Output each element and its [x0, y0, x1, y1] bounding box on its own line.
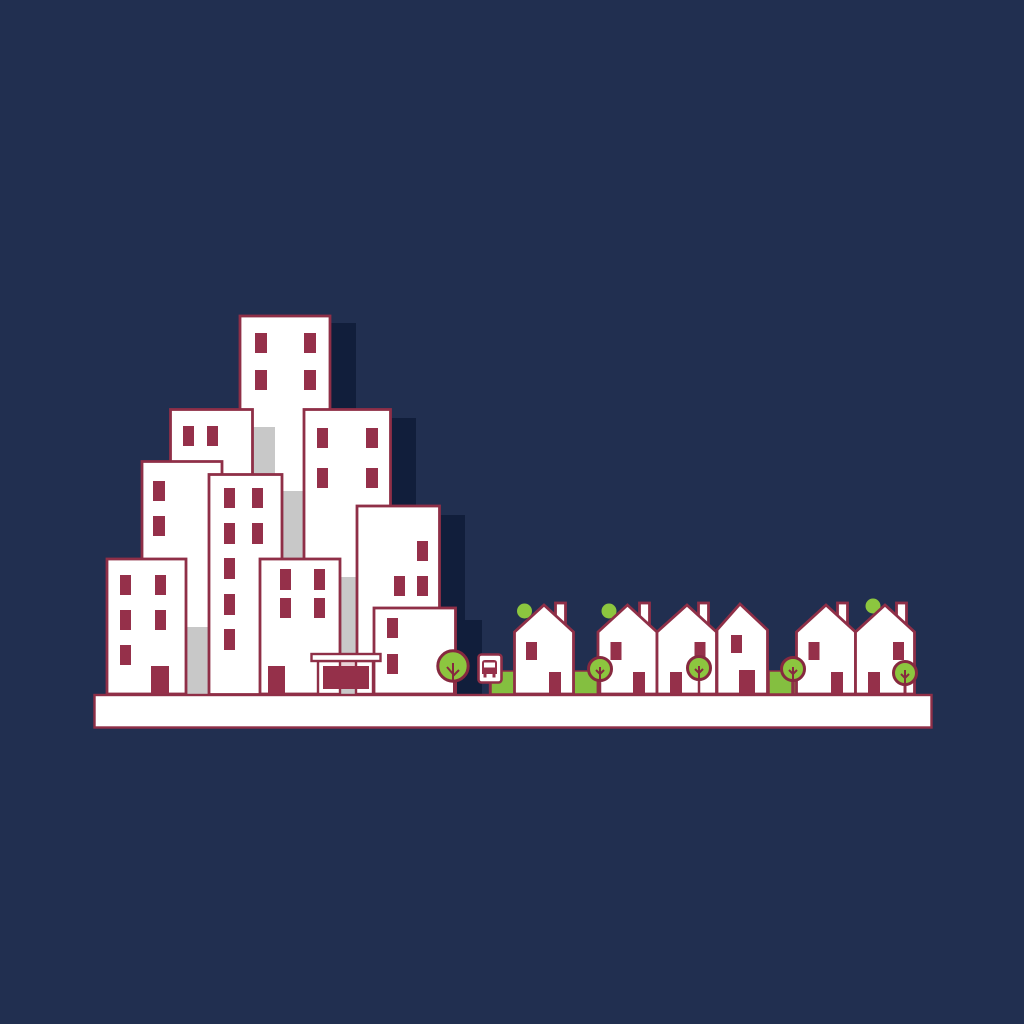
- building: mid right: [357, 506, 440, 694]
- building: mid left: [142, 462, 222, 694]
- small street trees: [588, 656, 916, 694]
- building: front centre: [260, 559, 340, 694]
- house 4: [717, 604, 768, 694]
- building: upper left: [170, 410, 252, 480]
- house 3: [657, 603, 716, 694]
- building shadows: [331, 323, 482, 694]
- building: front right: [374, 608, 456, 694]
- tower: tallest: [240, 316, 330, 694]
- tree 1: [588, 658, 612, 694]
- tree 4: [894, 662, 916, 694]
- house 1: [514, 603, 574, 694]
- house 6: [856, 603, 914, 694]
- house 2: [598, 603, 657, 694]
- row of houses: [514, 603, 914, 694]
- inner grey shadows: [253, 427, 303, 561]
- building: narrow centre: [209, 474, 282, 694]
- tree 3: [782, 658, 804, 694]
- icon: bus stop sign: [478, 654, 502, 694]
- tree: [438, 651, 468, 694]
- building: upper right: [304, 410, 390, 694]
- city skyline: [107, 316, 482, 694]
- tree 2: [688, 656, 710, 694]
- green tree tops behind houses: [517, 598, 880, 618]
- transit shelter: [312, 654, 380, 694]
- lawns: [491, 671, 797, 694]
- street tree and bus stop: [438, 651, 502, 694]
- house 5: [796, 603, 856, 694]
- ground platform: [94, 695, 932, 728]
- building: front left: [107, 559, 186, 694]
